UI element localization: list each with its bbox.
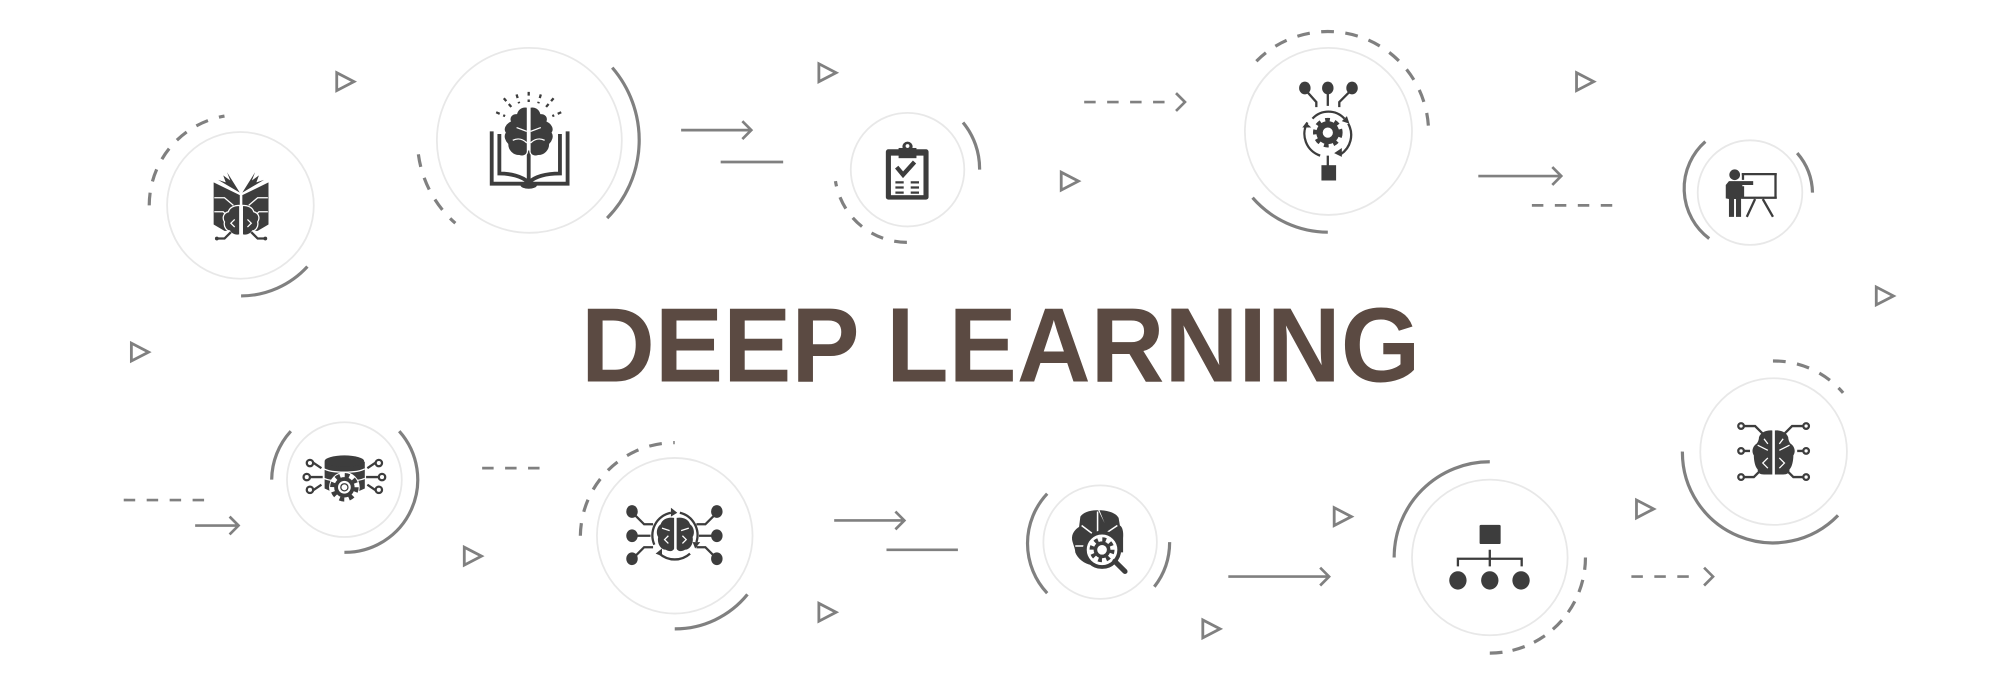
arrow: bottom left — [195, 517, 239, 534]
node 3: clipboard checklist — [835, 113, 980, 242]
node 9: hierarchy — [1394, 462, 1585, 653]
arrow: top 1 — [681, 121, 751, 139]
arrow: top 2 — [1478, 167, 1561, 185]
arrow: bottom 2 — [834, 512, 904, 529]
icon: database — [304, 455, 385, 503]
node 7: brain cycle network — [580, 443, 753, 629]
node 2: brain over open book — [418, 48, 639, 233]
icon: circuit brain — [1738, 423, 1809, 480]
arrow: bottom dashed — [1631, 568, 1713, 586]
icon: process gear — [1299, 82, 1358, 180]
node 1: book with circuit brain — [149, 116, 314, 296]
arrow: bottom 3 — [1228, 568, 1329, 586]
node 8: brain with magnifier and gear — [1028, 485, 1170, 599]
icon: brain with arrows and nodes — [626, 505, 723, 565]
node 4: inputs, process gear, output — [1245, 32, 1429, 232]
icon: brain magnifier — [1072, 510, 1125, 571]
arrow: top dashed — [1084, 93, 1185, 111]
icon: book brain — [214, 172, 268, 240]
node 10: brain circuit — [1682, 361, 1847, 543]
node 6: database gear network — [272, 422, 418, 552]
triangle markers — [131, 64, 1893, 638]
node 5: presenter at board — [1684, 140, 1812, 245]
icon: open book and brain — [492, 92, 568, 189]
arrows and connector lines — [124, 93, 1713, 586]
icon: hierarchy chart — [1449, 525, 1530, 590]
icon: presenter — [1726, 169, 1777, 217]
title: DEEP LEARNING — [581, 286, 1420, 404]
icon: clipboard — [886, 142, 929, 200]
